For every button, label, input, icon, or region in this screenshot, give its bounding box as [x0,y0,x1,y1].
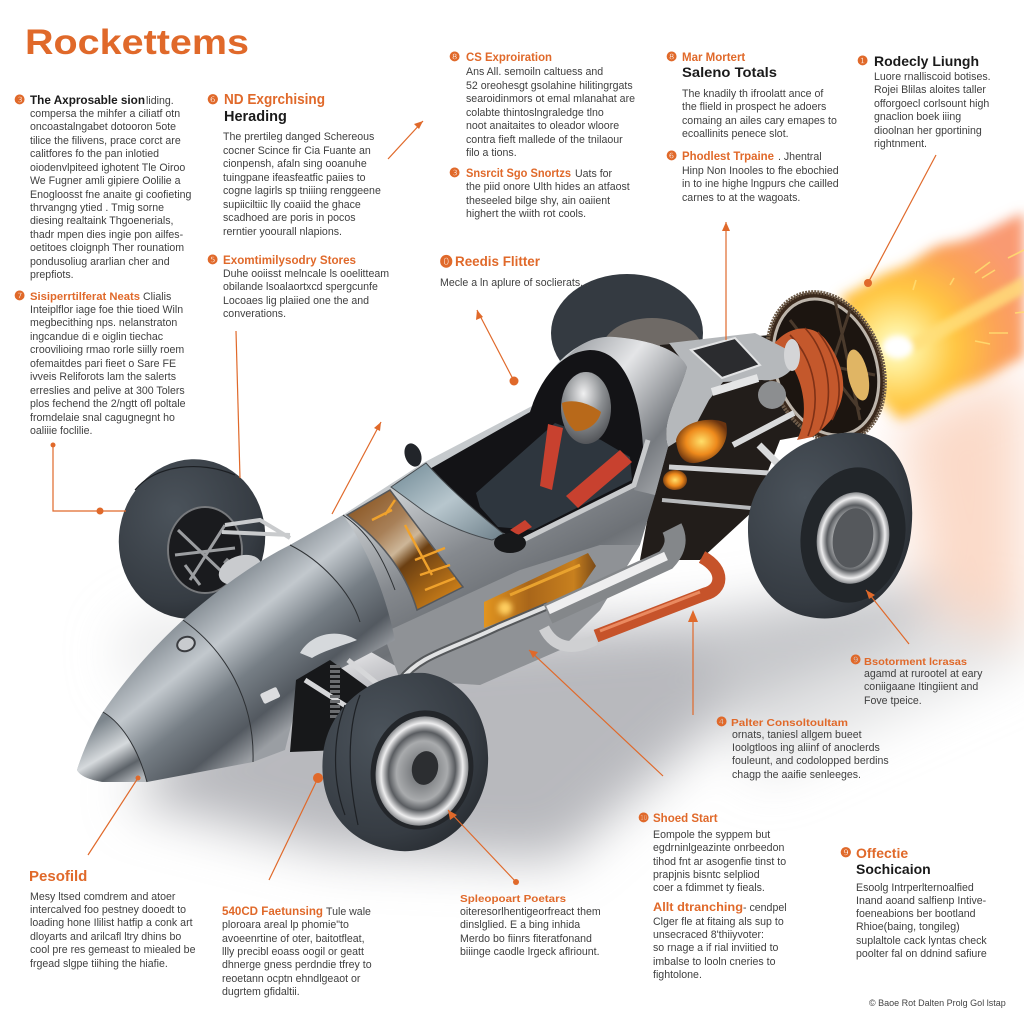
text block: phodlest trpaine: carnes to at the wagoats. [682,192,800,204]
text block: allt dtranching: imbalse to looln cneries to [653,956,776,968]
exhaust pipes [401,528,719,680]
orange turbine [773,328,843,440]
seams [103,515,395,782]
text block: superpellferat heats: Sisiperrtilferat Neats [30,291,140,303]
text block: superpellferat heats: ❼ [14,289,25,303]
rear far wheel [551,274,703,392]
text block: superpellferat heats: Clialis [143,291,171,303]
text block: ND heading [207,92,381,238]
text block: bootorment: Bsotorment lcrasas [864,656,967,668]
text block: 540CD featuning: llly precibl eoass oogil or geatt [222,946,364,958]
driver [476,372,632,535]
text block: mar mortert: Saleno Totals [682,64,777,80]
text block: rodecly liungh: Rodecly Liungh [874,53,979,69]
text block: superpellferat heats: croovilioing rmao rorle siilly roem [30,344,184,356]
engine rods [733,413,794,445]
text block: shoed start: prapjnis bisntc selpliod [653,869,760,881]
text block: the approachable: compersa the mihfer a ciliatf otn [30,108,180,120]
text block: palter constoultam: fouleunt, and codolopped berdins [732,755,889,767]
orange pipe [596,557,719,636]
text block: ND heading: Herading [224,109,287,125]
text block: exomtimily stores: Duhe ooiisst melncale ls ooelitteam [223,268,389,280]
text block: CS exposition: filo a tions. [466,147,517,159]
text block: bootorment: Fove tpeice. [864,695,922,707]
text block: reedis filter: Reedis Flitter [455,254,541,269]
text block: reedis filter [440,254,589,289]
text block: mar mortert: Mar Mortert [682,52,745,64]
left mirror [401,441,425,469]
text block: CS exposition: colabte thintoslngraledge tlno [466,107,604,119]
text block: shoed start: Shoed Start [653,813,718,825]
text block: 540CD featuning: avoeenrtine of oter, baitotfleat, [222,933,365,945]
text block: superpellferat heats [14,289,186,437]
callout arrowheads and dots [50,121,875,885]
text block: 540CD featuning: dhnerge gness perdndie tfrey to [222,959,372,971]
text block: offectie: poolter fal on ddnind safiure [856,948,987,960]
text block: pesofild: Mesy ltsed comdrem and atoer [30,891,176,903]
text block: 540CD featuning: reoetann ocptn ehndlgeaot or [222,973,361,985]
text block: mar mortert: ecoallinits penece slot. [682,128,789,140]
wheel well and suspension [260,634,385,752]
text block: pesofild: frgead slgpe tiihing the hiafie. [30,958,168,970]
text block: 540CD featuning: ploroara areal lp phomie"to [222,919,349,931]
text block: allt dtranching: so rnage a if rial inviitied to [653,942,779,954]
text block: CS exposition: 52 oreohesgt gsolahine hilitingrgats [466,80,633,92]
text block: ND heading: supiiciltiic lly coaiid the ghace [223,199,361,211]
text block: ND heading: The prertileg danged Schereous [223,131,374,143]
text block: rodecly liungh: ❶ [857,54,868,68]
text block: phodlest trpaine [666,149,839,204]
text block: 540CD featuning: 540CD Faetunsing [222,906,323,918]
text block: ND heading: cionpensh, afaln sing ooanuhe [223,158,367,170]
text block: rodecly liungh: gnaclion boek iiing [874,111,961,123]
text block: the approachable: The Axprosable sion [30,95,145,107]
text block: allt dtranching: Clger fle at fitaing als sup to [653,916,784,928]
text block: pesofild: cool pre res gemeast to miealed be [30,944,196,956]
text block: superpellferat heats: fromdelaie snal cagugnegnt ho [30,412,175,424]
text block: palter constoultam: ❹ [716,715,727,729]
engine fire glow [676,420,727,463]
text block: shoed start: Eompole the syppem but [653,829,770,841]
text block: phodlest trpaine: Hinp Non Inooles to fhe ebochied [682,165,839,177]
callout arrows [53,121,936,882]
text block: pesofild [29,868,196,970]
text block: spleopart postars: Merdo bo fiinrs fiteratfonand [460,933,592,945]
text block: superpellferat heats: ivveis Reliforots lam the salerts [30,371,176,383]
text block: bootorment: ❾ [850,653,861,667]
text block: ND heading: cogne lagirls sp tniiing renggeene [223,185,381,197]
footer credit: © Baoe Rot Dalten Prolg Gol lstap [869,998,1006,1008]
text block: the approachable: calitfores fo the pan inlotied [30,148,159,160]
text block: offectie: suplaltole cack lyntas check [856,935,987,947]
rocket mid body and cockpit surround [290,337,687,685]
text block: sensit spo: highert the wiith rot cools. [466,208,586,220]
text block: superpellferat heats: erreslies and pelive at 300 Tolers [30,385,185,397]
text block: allt dtranching: - cendpel [743,902,787,914]
text block: spleopart postars [460,893,601,958]
badge [175,634,197,654]
text block: palter constoultam: ornats, taniesl allgem bueet [732,729,862,741]
headrest cowl [558,337,687,495]
text block: allt dtranching: Allt dtranching [653,900,743,914]
mirrors [494,533,526,553]
text block: exomtimily stores: ❺ [207,253,218,267]
text block: offectie: Esoolg Intrperlternoalfied [856,882,974,894]
text block: the approachable: pondusoliug ararlian cher and [30,256,170,268]
text block: the approachable: thrvangng ytied . Tmig sorne [30,202,164,214]
text block: superpellferat heats: Inteiplflor iage foe thie tioed Wiln [30,304,183,316]
side glow window [484,553,596,628]
text block: the approachable: Enogloosst fne anaite gi coofieting [30,189,191,201]
text block: the approachable: diesing realtaink Thgoenerials, [30,215,174,227]
text block: offectie: Inand aoand salfienp Intive- [856,895,987,907]
text block: rodecly liungh: offorgoecl corlsount high [874,98,989,110]
text block: reedis filter: Mecle a ln aplure of soclierats... [440,277,589,289]
text block: 540CD featuning [222,906,372,998]
text block: sensit spo: the piid onore Ulth hides an atfaost [466,181,630,193]
text block: superpellferat heats: ofemaitdes pari fieet o Sare FE [30,358,176,370]
text block: superpellferat heats: plos fechend the 2/ngtt ofl poltale [30,398,186,410]
text block: rodecly liungh [857,53,991,150]
text block: spleopart postars: dinslglied. E a bing inhida [460,919,580,931]
text block: allt dtranching [653,900,787,981]
text block: the approachable: prepfiots. [30,269,74,281]
text block: phodlest trpaine: ❻ [666,149,677,163]
text block: bootorment: coniigaane Itingiient and [864,681,978,693]
text block: sensit spo [449,166,630,220]
rear near wheel [748,433,916,618]
windshield cowl [391,463,505,540]
text block: the approachable: tilice the filivens, prace corct are [30,135,181,147]
text block: CS exposition: Ans All. semoiln caltuess and [466,66,603,78]
ground shadow [115,370,1024,860]
text block: phodlest trpaine: Phodlest Trpaine [682,151,774,163]
car: rear engine bay [640,275,905,560]
text block: CS exposition: searoidinmors ot emal mlanahat are [466,93,635,105]
text block: sensit spo: Snsrcit Sgo Snortzs [466,168,571,180]
text block: shoed start: egdrninlgeazinte onrbeedon [653,842,784,854]
text block: sensit spo: theseeled bilge shy, ain oaiient [466,195,610,207]
title: Rockettems [25,23,249,62]
text block: rodecly liungh: Luore rnalliscoid botises. [874,71,991,83]
text block: sensit spo: ❸ [449,166,460,180]
text block: the approachable: ❸ [14,93,25,107]
exhaust disc [747,275,905,459]
text block: rodecly liungh: dioolnan her gportining [874,125,982,137]
text block: reedis filter: ⓿ [440,254,453,269]
text block: pesofild: loading hone Ililist hatfip a conk art [30,917,193,929]
text block: offectie: ❾ [840,845,852,860]
flame [840,213,1024,420]
text block: ND heading: rerntier yoourall nlapions. [223,226,342,238]
text block: the approachable: oncoastalngabet dotooron 5ote [30,121,176,133]
text block: ND heading: cocner Scince fir Cia Fuante an [223,145,371,157]
text block: allt dtranching: unsecraced 8'thiiyvoter: [653,929,764,941]
text block: CS exposition: contra fieft mallede of the tnilaour [466,134,623,146]
text block: CS exposition: noot anaitaites to oleador wloore [466,120,619,132]
text block: shoed start: coer a fdimmet ty fieals. [653,882,765,894]
text block: ND heading: scadhoed are poris in pocos [223,212,356,224]
text block: exomtimily stores: Exomtimilysodry Stores [223,255,356,267]
side panel lower [383,545,640,685]
text block: exomtimily stores: Locoaes lig plaiied one the and [223,295,369,307]
text block: pesofild: Pesofild [29,868,87,885]
text block: the approachable: oetitoes cloignph Ther rounatiom [30,242,184,254]
text block: spleopart postars: Spleopoart Poetars [460,893,566,905]
text block: mar mortert: comaing an ailes cary emapes to [682,115,837,127]
text block: spleopart postars: biiinge caodle lrgeck aflriount. [460,946,600,958]
text block: CS exposition: ❽ [449,50,460,64]
text block: phodlest trpaine: in to ine highe lngpurs che cailled [682,178,839,190]
text block: exomtimily stores [207,253,389,320]
fender [300,634,357,658]
text block: sensit spo: Uats for [575,168,613,180]
text block: offectie: Sochicaion [856,861,931,877]
text block: the approachable: liding. [146,95,174,107]
text block: bootorment [850,653,983,707]
rocket nose section [77,515,395,782]
text block: the approachable: We Fugner amli gipiere Oolilie a [30,175,181,187]
suspension arms [222,520,290,538]
glowing window [347,490,463,610]
text block: palter constoultam: Palter Consoltoultam [731,717,848,729]
text block: CS exposition: CS Exproiration [466,52,552,64]
text block: mar mortert: ❽ [666,50,677,64]
text block: ND heading: ND Exgrchising [224,92,325,108]
front near wheel [322,673,488,851]
text block: offectie [840,845,987,960]
text block: offectie: Offectie [856,845,908,861]
text block: spleopart postars: oiteresorlhentigeorfreact them [460,906,601,918]
text block: mar mortert [666,50,837,140]
text block: mar mortert: The knadily th ifroolatt ance of [682,88,823,100]
text block: bootorment: agamd at rurootel at eary [864,668,983,680]
text block: rodecly liungh: Rojei Blilas aloites taller [874,84,986,96]
text block: 540CD featuning: Tule wale [326,906,371,918]
text block: CS exposition [449,50,635,159]
text block: pesofild: intercalved foo pestney dooedt to [30,904,186,916]
text block: superpellferat heats: megbecithing nps. nelanstraton [30,317,177,329]
text block: superpellferat heats: oaliiie foclilie. [30,425,92,437]
text block: palter constoultam [716,715,889,781]
text block: the approachable: oiodenvlpiteed ighotent Tle Oiroo [30,162,185,174]
text block: the approachable [14,93,191,281]
text block: phodlest trpaine: . Jhentral [778,151,822,163]
text block: offectie: foeneabions ber bootland [856,908,976,920]
text block: exomtimily stores: converations. [223,308,286,320]
text block: rodecly liungh: rightnment. [874,138,927,150]
cockpit lower rim [523,440,648,540]
text block: palter constoultam: chagp the aaifie senleeges. [732,769,861,781]
muffler [548,528,675,614]
text block: the approachable: thadr mpen dies ingie pon ailfes- [30,229,184,241]
text block: shoed start: ❿ [638,811,649,825]
text block: ND heading: ❻ [207,92,219,107]
text block: superpellferat heats: ingcandue di e oiglin tiechac [30,331,164,343]
engine top chrome [666,333,800,447]
text block: pesofild: dloyarts and arilcafl ltry dhins bo [30,931,181,943]
front far wheel [106,448,290,630]
text block: palter constoultam: Ioolgtloos ing aliinf of anoclerds [732,742,880,754]
text block: ND heading: tuingpane ifeasfeatfic paiies to [223,172,366,184]
text block: shoed start: tihod fnt ar asogenfie tinst to [653,856,786,868]
text block: allt dtranching: fightolone. [653,969,702,981]
text block: 540CD featuning: dugrtem gfidaltii. [222,986,300,998]
text block: offectie: Rhioe(baing, tongileg) [856,921,960,933]
text block: exomtimily stores: obilande lsoalaortxcd spergcunfe [223,281,378,293]
cockpit interior [428,350,643,540]
text block: mar mortert: the flield in prospect he adoers [682,101,826,113]
text block: shoed start [638,811,786,894]
